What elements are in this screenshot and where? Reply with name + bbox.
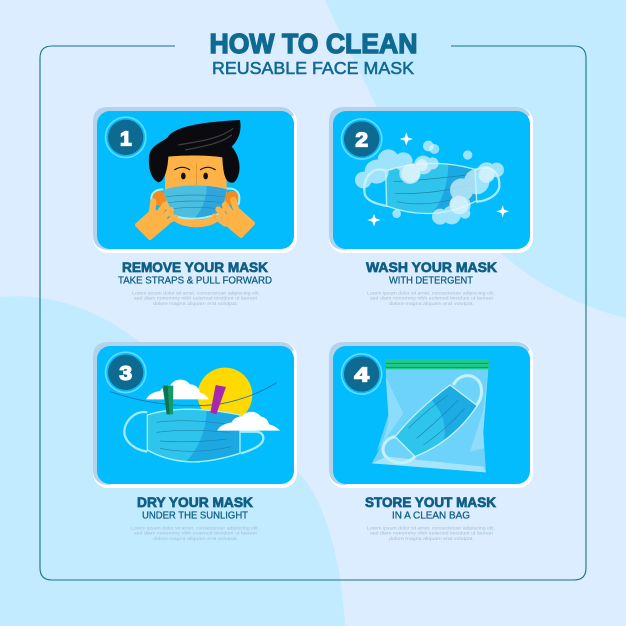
step 1 text <box>118 260 272 306</box>
badge 4 <box>341 353 383 395</box>
step 3 text: dolore magna aliquam erat volutpat. <box>153 536 238 541</box>
step 3 text <box>131 495 259 541</box>
illustration: man putting on mask <box>137 120 253 238</box>
step 1 text: dolore magna aliquam erat volutpat. <box>153 301 238 306</box>
step 2 text <box>366 260 497 306</box>
step 1 text: REMOVE YOUR MASK <box>122 260 268 275</box>
panel: step 2 wash mask <box>329 107 533 306</box>
badge 1 <box>105 116 147 158</box>
badge 4: 4 <box>354 364 370 387</box>
step 4 text <box>365 495 496 541</box>
step 1 text: Lorem ipsum dolor sit amet, consectetuer adipiscing elit, <box>132 290 260 296</box>
step 1 text: sed diam nonummy nibh euismod tincidunt ut laoreet <box>134 296 258 301</box>
step 3 text: Lorem ipsum dolor sit amet, consectetuer adipiscing elit, <box>131 526 259 530</box>
badge 3: 3 <box>119 362 132 385</box>
title: REUSABLE FACE MASK <box>212 58 414 78</box>
step 2 text: sed diam nonummy nibh euismod tincidunt ut laoreet <box>370 296 494 301</box>
badge 2 <box>341 118 383 160</box>
step 2 text: dolore magna aliquam erat volutpat. <box>389 301 474 306</box>
step 4 text: sed diam nonummy nibh euismod tincidunt ut laoreet <box>370 531 494 536</box>
left hand <box>137 202 176 238</box>
step 4 text: IN A CLEAN BAG <box>392 510 470 522</box>
step 2 text: WITH DETERGENT <box>389 276 473 286</box>
right hand <box>214 200 253 236</box>
panel: step 3 dry mask <box>93 342 297 541</box>
illustration: mask drying on line <box>110 368 280 462</box>
panel: step 1 remove mask <box>93 107 297 306</box>
badge 2: 2 <box>355 129 368 152</box>
step 4 text: Lorem ipsum dolor sit amet, consectetuer adipiscing elit, <box>367 526 495 530</box>
title: HOW TO CLEAN <box>210 28 418 59</box>
step 3 text: UNDER THE SUNLIGHT <box>142 510 248 522</box>
step 2 text: Lorem ipsum dolor sit amet, consectetuer adipiscing elit, <box>367 290 495 296</box>
step 1 text: TAKE STRAPS & PULL FORWARD <box>118 276 272 286</box>
step 3 text: sed diam nonummy nibh euismod tincidunt ut laoreet <box>134 531 258 536</box>
step 2 text: WASH YOUR MASK <box>366 260 497 275</box>
panel: step 4 store mask <box>329 342 533 541</box>
badge 3 <box>105 351 147 393</box>
badge 1: 1 <box>120 127 132 150</box>
step 3 text: DRY YOUR MASK <box>137 495 253 510</box>
step 4 text: dolore magna aliquam erat volutpat. <box>389 536 474 541</box>
frame <box>40 46 586 580</box>
title <box>210 28 418 78</box>
illustration: mask in a clean bag <box>372 359 489 472</box>
step 4 text: STORE YOUT MASK <box>365 495 496 510</box>
illustration: mask with soap suds <box>355 132 509 227</box>
